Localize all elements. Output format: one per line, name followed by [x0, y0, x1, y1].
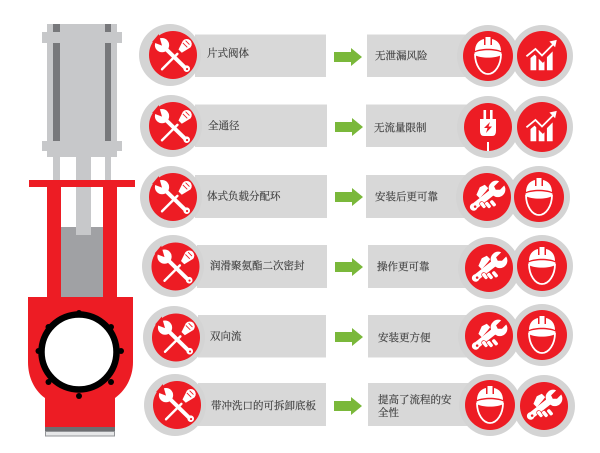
row 5 — [143, 304, 573, 368]
benefit text: 全性 — [378, 406, 399, 419]
benefit bar — [366, 166, 570, 228]
feature text: 双向流 — [210, 330, 242, 342]
icon: hard hat — [517, 310, 567, 360]
feature bar — [139, 24, 326, 86]
feature text: 全通径 — [208, 119, 240, 132]
icon: hard hat — [514, 172, 564, 222]
arrow — [335, 258, 363, 276]
feature bar — [144, 374, 326, 436]
arrow — [335, 188, 363, 206]
row 3 — [140, 166, 570, 228]
arrow — [335, 118, 363, 136]
icon: wrench in hand — [465, 312, 513, 360]
benefit bar — [368, 304, 573, 367]
icon: plug — [464, 103, 512, 151]
feature bar — [142, 235, 327, 297]
flange ring — [36, 310, 124, 399]
valve illustration — [28, 24, 135, 436]
feature bar — [140, 166, 327, 228]
benefit text: 安装后更可靠 — [375, 190, 438, 203]
benefit text: 无泄漏风险 — [375, 49, 428, 62]
icon: hard hat — [517, 241, 567, 291]
icon: wrench in hand — [465, 244, 513, 292]
benefit text: 操作更可靠 — [377, 260, 430, 273]
benefit text: 安装更方便 — [378, 331, 431, 344]
arrow — [334, 397, 362, 415]
feature bar — [140, 95, 327, 157]
icon: growth chart — [517, 31, 567, 81]
icon: hard hat — [465, 380, 515, 430]
row 2 — [140, 95, 573, 158]
valve body — [28, 180, 135, 427]
icon: tools — [151, 242, 200, 291]
benefit text: 提高了流程的安 — [378, 395, 452, 406]
benefit bar — [367, 25, 573, 87]
feature text: 体式负载分配环 — [207, 190, 281, 202]
icon: growth chart — [517, 102, 567, 152]
benefit bar — [368, 374, 575, 437]
row 1 — [139, 24, 573, 87]
feature bar — [143, 306, 326, 368]
actuator rods — [53, 155, 111, 235]
row 6 — [144, 374, 575, 437]
icon: wrench in hand — [463, 173, 511, 221]
benefit bar — [368, 235, 573, 299]
benefit text: 无流量限制 — [374, 121, 426, 134]
icon: tools — [153, 381, 201, 429]
actuator cylinder — [42, 24, 122, 157]
icon: tools — [149, 31, 197, 79]
arrow — [334, 48, 362, 66]
icon: tools — [152, 313, 200, 362]
icon: wrench in hand — [520, 382, 568, 430]
icon: tools — [149, 173, 197, 221]
feature text: 带冲洗口的可拆卸底板 — [211, 399, 316, 412]
row 4 — [142, 235, 573, 299]
icon: tools — [149, 102, 197, 150]
benefit bar — [366, 96, 573, 158]
bottom plate — [45, 427, 115, 436]
feature text: 润滑聚氨酯二次密封 — [210, 259, 305, 272]
icon: hard hat — [463, 31, 513, 81]
feature text: 片式阀体 — [207, 46, 249, 60]
arrow — [335, 328, 363, 346]
centre rod over crossbar — [76, 187, 91, 227]
gate blade — [61, 227, 103, 297]
